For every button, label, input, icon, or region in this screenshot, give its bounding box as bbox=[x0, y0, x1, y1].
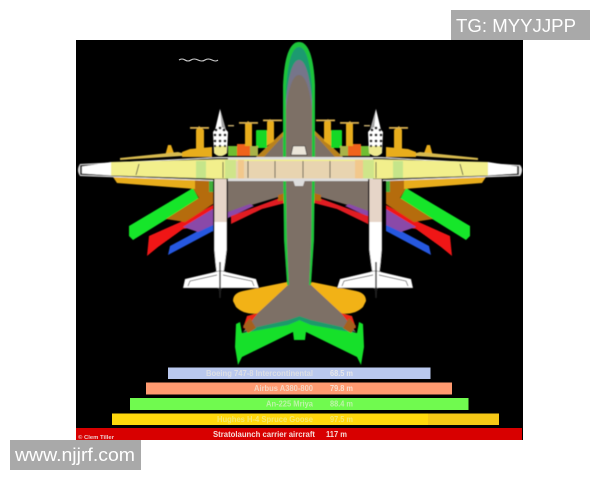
wingspan bars bbox=[76, 368, 522, 441]
bar: Stratolaunch carrier aircraft: 117 m bbox=[326, 430, 347, 439]
bird silhouette squiggle bbox=[179, 59, 218, 61]
black panel bbox=[76, 40, 523, 440]
bar: Stratolaunch carrier aircraft: Stratolaunch carrier aircraft bbox=[213, 430, 315, 439]
credit: © Clem Tiller bbox=[78, 434, 115, 441]
bar: Stratolaunch carrier aircraft bbox=[76, 428, 522, 440]
bar: Hughes H-4 Spruce Goose: Hughes H-4 Spruce Goose bbox=[217, 415, 314, 424]
bar: Boeing 747-8 Intercontinental: Boeing 747-8 Intercontinental bbox=[206, 369, 313, 378]
aircraft overlay comparison bbox=[78, 42, 522, 365]
swept wings of compared aircraft bbox=[113, 130, 486, 256]
bar: Hughes H-4 Spruce Goose: 97.5 m bbox=[330, 415, 353, 424]
bar: Boeing 747-8 Intercontinental: 68.5 m bbox=[330, 369, 353, 378]
watermark: site bbox=[10, 440, 141, 470]
watermark: site: www.njjrf.com bbox=[14, 445, 135, 465]
bar: Hughes H-4 Spruce Goose bbox=[112, 414, 499, 425]
twin Stratolaunch fuselages and engine pods bbox=[183, 109, 413, 298]
bar: Airbus A380-800 bbox=[146, 382, 452, 394]
bar: An-225 Mriya: An-225 Mriya bbox=[266, 400, 314, 408]
central fuselage overlay with nose bbox=[283, 42, 315, 285]
bar: Boeing 747-8 Intercontinental bbox=[168, 368, 430, 379]
tail sections of compared aircraft bbox=[233, 282, 366, 365]
Stratolaunch wing bbox=[78, 146, 522, 186]
bar: Airbus A380-800: 79.8 m bbox=[330, 384, 353, 393]
engines and propellers bbox=[120, 119, 478, 160]
bar: An-225 Mriya: 88.4 m bbox=[330, 400, 353, 408]
bar: Airbus A380-800: Airbus A380-800 bbox=[254, 384, 314, 393]
bar: An-225 Mriya bbox=[130, 398, 468, 410]
watermark: TG: TG: MYYJJPP bbox=[456, 16, 576, 36]
watermark: TG bbox=[451, 10, 590, 40]
